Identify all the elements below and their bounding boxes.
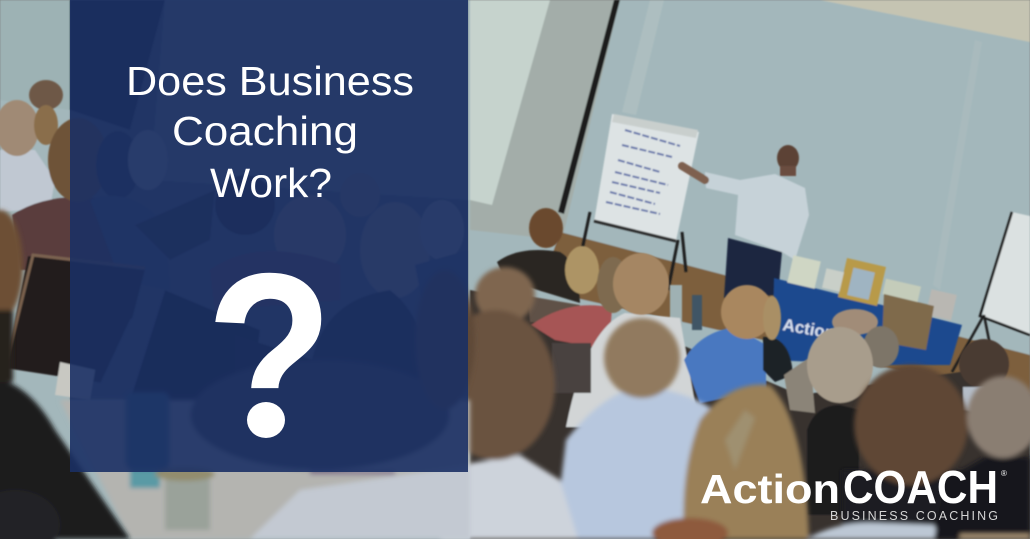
title: Does Business Coaching Work? bbox=[126, 58, 414, 206]
audience seated on the left, seen through the panel bbox=[0, 0, 468, 420]
person in black t-shirt, left foreground bbox=[0, 210, 130, 539]
logo tagline: BUSINESS COACHING bbox=[830, 509, 998, 523]
flipchart on stand bbox=[582, 114, 699, 290]
second flipchart at right edge bbox=[952, 212, 1030, 372]
audience seated on the right bbox=[470, 208, 1030, 539]
black screen edge bbox=[558, 0, 620, 214]
ActionCOACH logo bbox=[700, 461, 1007, 523]
book display table with Action banner bbox=[772, 255, 962, 365]
book display table with Action banner: Action bbox=[781, 315, 837, 343]
logo wordmark: COACH: COACH bbox=[843, 461, 998, 513]
title: Does Business Coaching Work?: Does Business bbox=[126, 58, 414, 104]
title: Does Business Coaching Work?: Work? bbox=[210, 160, 332, 206]
presenter bbox=[682, 145, 809, 298]
title: Does Business Coaching Work?: Coaching bbox=[172, 108, 358, 154]
large question mark icon bbox=[215, 272, 322, 438]
table with glasses in the foreground bbox=[60, 270, 475, 539]
navy translucent title panel bbox=[70, 0, 468, 472]
logo wordmark: Action: Action bbox=[700, 466, 840, 512]
logo registered mark: ® bbox=[1001, 469, 1007, 478]
audience foreground heads bbox=[435, 267, 1030, 539]
large question mark icon: ? bbox=[206, 225, 333, 488]
